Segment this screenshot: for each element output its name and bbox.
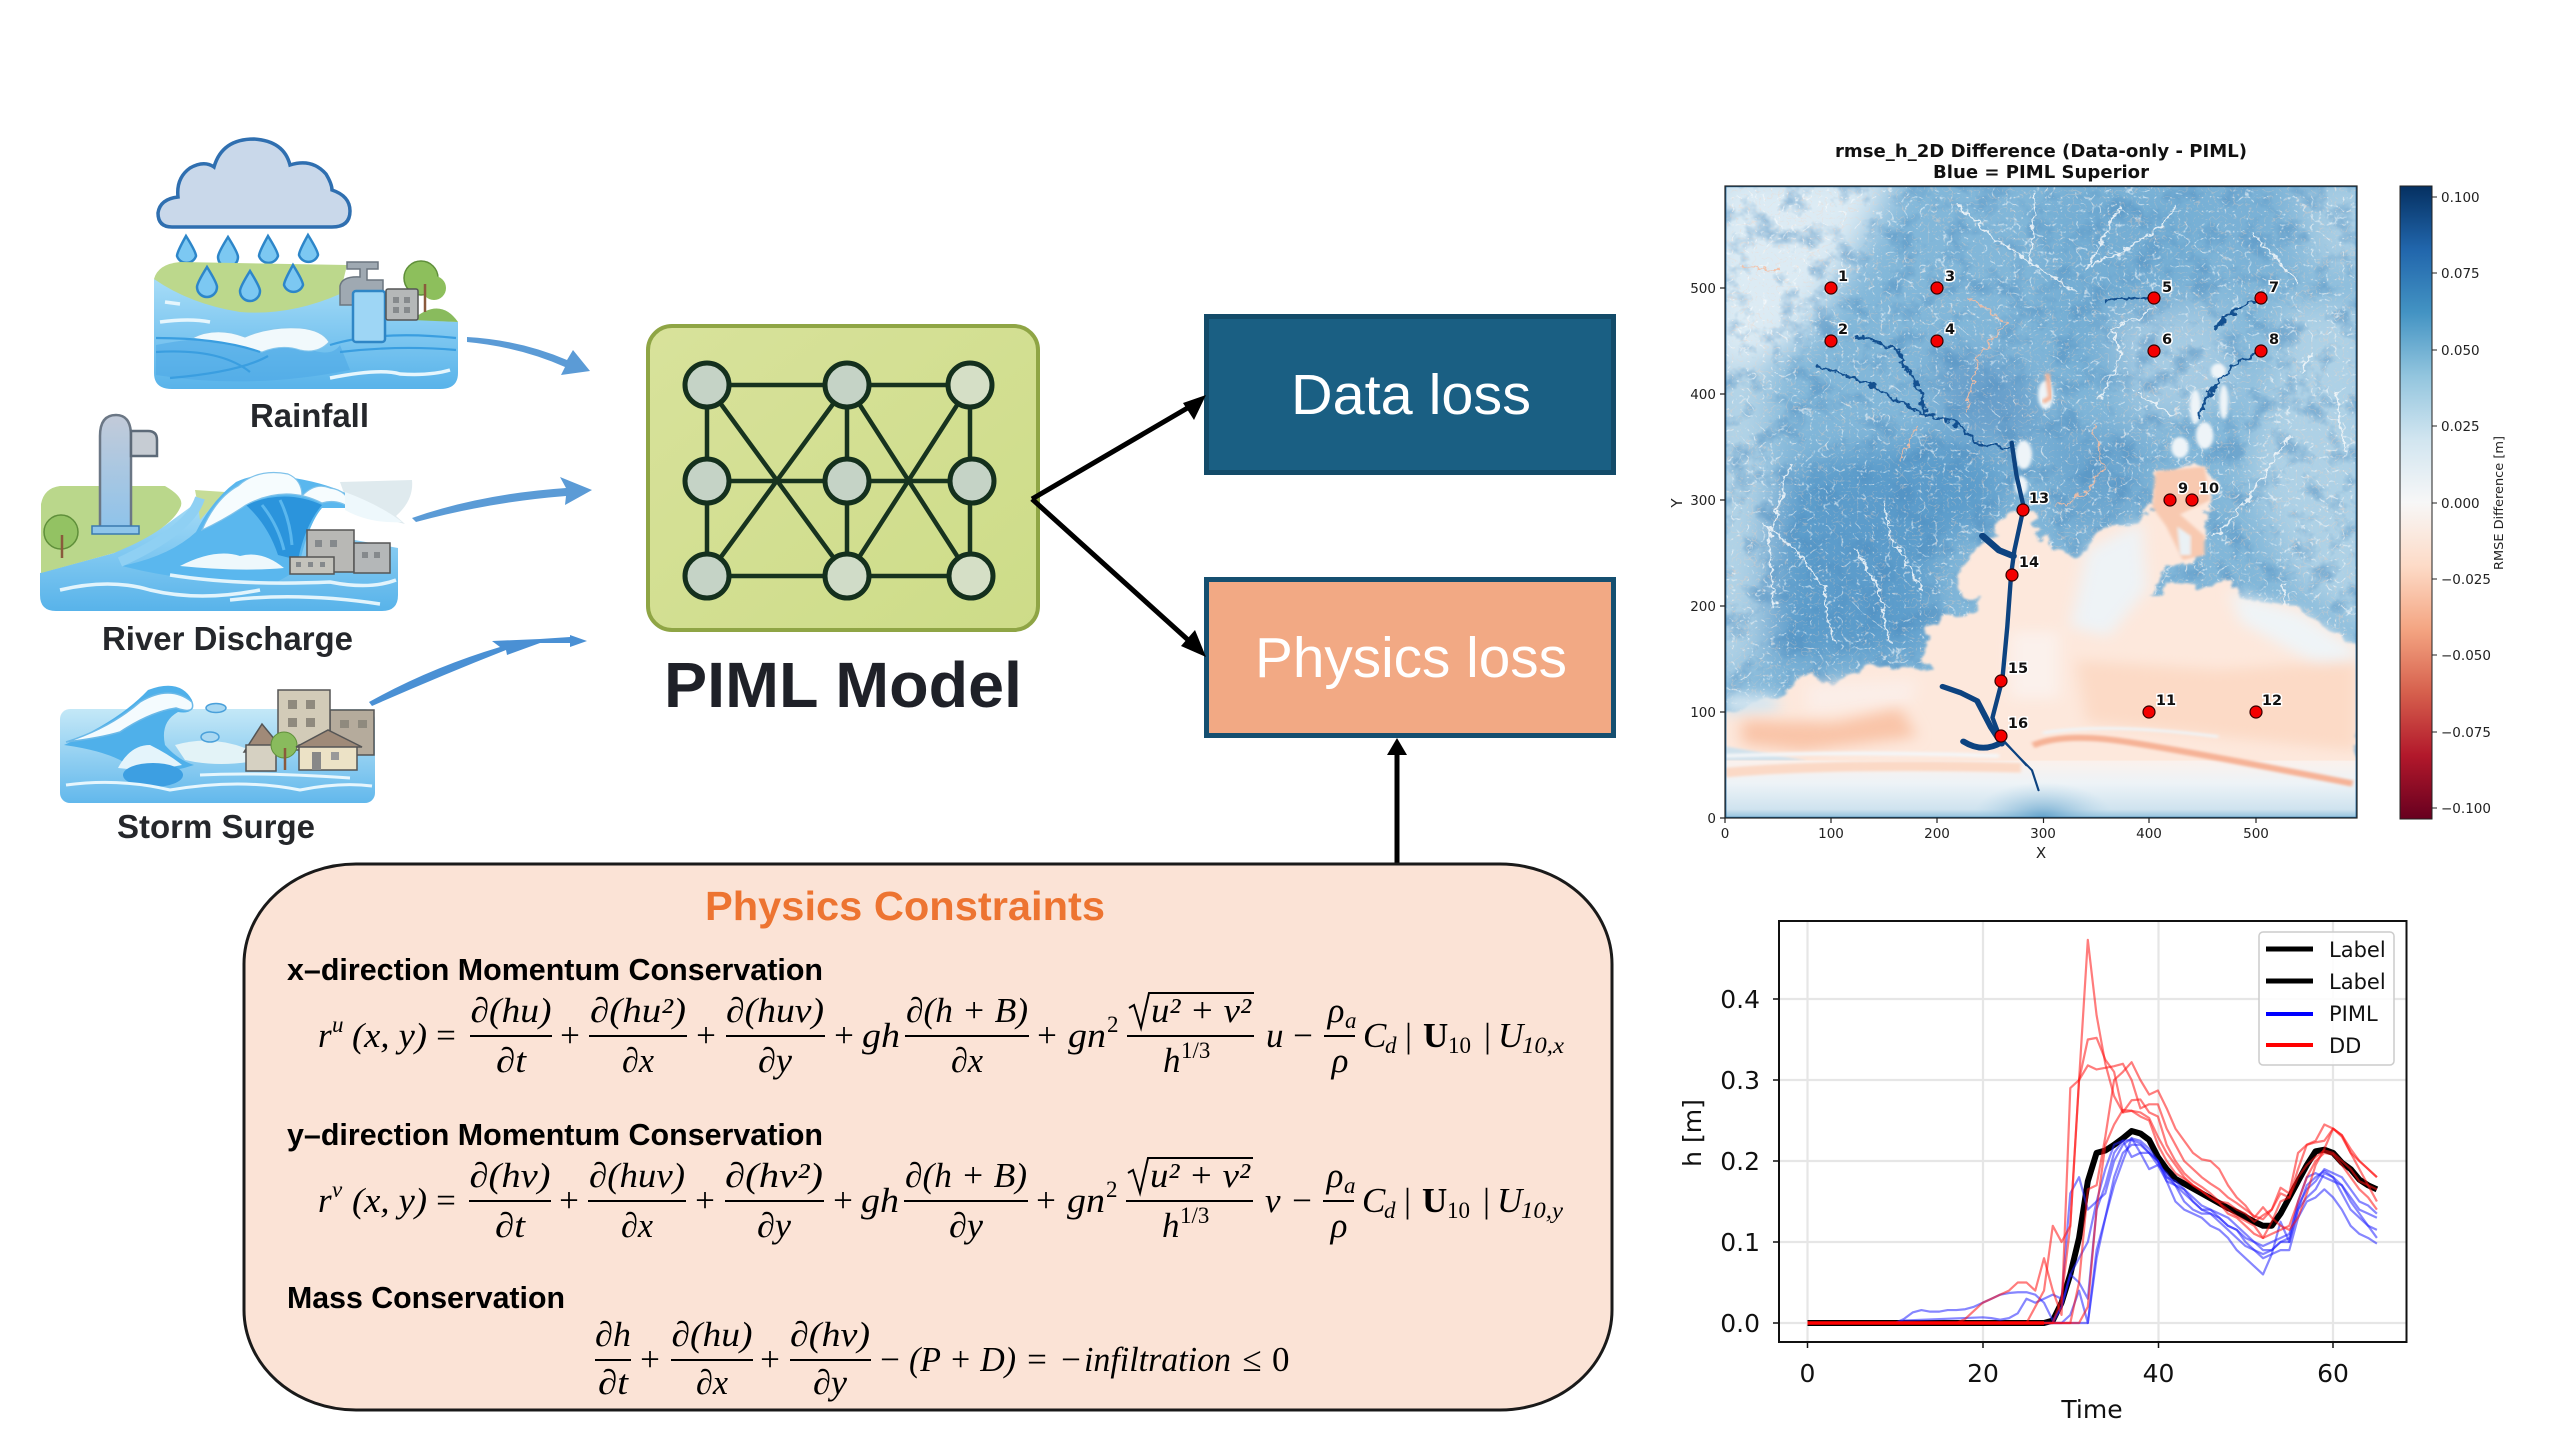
equation: y momentum: ∂(huv) [589,1156,685,1195]
white water streaks [160,302,450,378]
equation: mass conservation: ∂(hu) [672,1315,752,1354]
foam [118,745,182,769]
equation: x momentum: = [436,1016,456,1055]
tower base [92,526,139,534]
label curve [1808,1131,2377,1323]
PIML curves [1808,1138,2377,1323]
equation: mass conservation: ∂x [696,1363,728,1402]
equation: x momentum: gn [1068,1016,1106,1055]
equation: mass conservation: ∂t [598,1363,629,1402]
buildings [244,690,374,771]
equation: mass conservation: infiltration [1084,1340,1231,1379]
y axis label: h [m] [1678,1099,1707,1167]
station labels: 15 [2008,661,2028,677]
station labels: 11 [2156,693,2176,709]
equation: y momentum: 2 [1106,1177,1118,1202]
arrow: model to physics loss [1032,499,1206,657]
equation: x momentum: 10 [1448,1033,1471,1058]
colorbar ticks [2432,197,2437,808]
x tick labels: 20 [1967,1359,1999,1388]
flat DD baseline [1808,1321,2044,1325]
equation: y momentum: 10,y [1521,1198,1564,1223]
station labels: 6 [2162,332,2172,348]
plot background [1779,921,2406,1342]
arrow: storm surge to model [369,635,587,706]
box: Physics loss: Physics loss [1255,626,1567,690]
station labels: 1 [1838,269,1848,285]
spray drops [201,704,226,742]
y tick labels: 300 [1690,493,1716,509]
wave tube [246,496,322,560]
equation: x momentum: 1/3 [1181,1038,1210,1063]
land orange vein texture [1725,186,2357,712]
equation: mass conservation: ∂(hv) [790,1315,870,1354]
land white vein texture [1725,186,2357,712]
panel: physics constraints [244,864,1612,1410]
label: PIML Model: PIML Model [664,649,1022,721]
colorbar labels: −0.050 [2441,648,2491,664]
equation: y momentum: r [318,1181,332,1220]
label: Storm Surge: Storm Surge [117,808,315,845]
equation: y momentum [318,1156,1564,1245]
y tick labels [1690,281,1716,827]
station labels: 16 [2008,716,2028,732]
arrow: constraints to physics loss [1387,738,1407,864]
equation: y momentum: = [436,1181,456,1220]
tower [100,415,131,527]
y tick labels: 400 [1690,387,1716,403]
equation: x momentum: h [1163,1041,1180,1080]
equation: x momentum: U [1423,1016,1448,1055]
colorbar labels: 0.075 [2441,266,2480,282]
inland pale pool [2177,526,2191,555]
left coastal orange patch [1741,708,1917,751]
equation: mass conservation: − [1061,1340,1081,1379]
equation: x momentum: gh [862,1016,900,1055]
y tick labels: 200 [1690,599,1716,615]
colorbar labels [2441,190,2491,817]
wave crest [202,472,353,530]
arrow: rainfall to model [467,337,590,375]
network edges [707,385,970,576]
x tick labels: 200 [1924,826,1950,842]
equation: y momentum: | [1483,1181,1490,1220]
heading: x momentum: x–direction Momentum Conservation [287,952,823,987]
arrow: river discharge to model [412,477,592,522]
station labels: 3 [1945,269,1955,285]
x axis label: X [2036,844,2046,862]
tree [44,515,78,558]
equation: y momentum: + [833,1181,853,1220]
equation: mass conservation: + [640,1340,660,1379]
equation: y momentum: − [1292,1181,1312,1220]
colorbar labels: 0.050 [2441,343,2480,359]
equation: y momentum: u² + v² [1150,1156,1251,1195]
x tick labels: 500 [2243,826,2269,842]
network nodes [685,363,994,598]
equation: x momentum: a [1345,1008,1356,1033]
x tick labels: 100 [1818,826,1844,842]
equation: y momentum: v [1265,1181,1281,1220]
arrow: model to data loss [1032,395,1206,499]
legend: Label [2329,938,2386,962]
legend: Label [2329,970,2386,994]
station labels: 10 [2199,481,2219,497]
plain shading [1725,522,2357,751]
icon: tree [404,261,458,322]
equation: y momentum: ∂(h + B) [905,1156,1027,1195]
scene: storm surge [60,686,375,845]
wave lines [156,335,456,378]
equation: y momentum: C [1362,1181,1386,1220]
y tick labels: 500 [1690,281,1716,297]
equation: y momentum: + [1036,1181,1056,1220]
equation: mass conservation: + [760,1340,780,1379]
inland orange patch [2153,467,2210,560]
station labels: 8 [2269,332,2279,348]
x tick labels [1800,1359,2349,1388]
equation: x momentum: ∂(hu) [470,991,552,1030]
land [41,486,181,573]
x tick labels: 60 [2317,1359,2349,1388]
equation: x momentum: | [1484,1016,1491,1055]
y tick labels: 100 [1690,705,1716,721]
station labels: 14 [2019,555,2039,571]
x tick labels: 0 [1800,1359,1815,1388]
box: Data loss [1206,316,1614,472]
icon: building [386,289,418,320]
y tick labels: 0.4 [1720,985,1760,1014]
equation: y momentum: ∂y [757,1206,791,1245]
station labels: 4 [1945,322,1955,338]
equation: y momentum: ρ [1330,1206,1347,1245]
wave tube arcs [262,500,292,550]
station labels: 5 [2162,280,2172,296]
y tick labels: 0.1 [1720,1228,1760,1257]
equation: y momentum: 10 [1447,1198,1470,1223]
equation: y momentum: + [559,1181,579,1220]
heat map [1726,186,2356,818]
equation: y momentum: U [1497,1181,1525,1220]
x tick labels: 400 [2136,826,2162,842]
equation: x momentum: ∂x [951,1041,983,1080]
equation: x momentum: + [696,1016,716,1055]
legend: PIML [2329,1002,2378,1026]
station labels: 13 [2029,491,2049,507]
equation: y momentum: 1/3 [1180,1203,1209,1228]
buildings [290,530,390,574]
tower head [131,431,157,456]
water block [40,500,398,611]
tributaries [1815,298,2259,449]
sea swell [123,763,183,787]
sea plume [1972,782,2114,854]
equation: y momentum: ρ [1326,1156,1343,1195]
scene: river discharge [40,415,412,657]
spray [175,741,260,764]
equation: x momentum: ∂(hu²) [590,991,686,1030]
icon: house [296,730,362,770]
y tick labels: 0.3 [1720,1066,1760,1095]
grid lines [1779,921,2406,1342]
panel background [244,864,1612,1410]
equation: y momentum: U [1422,1181,1447,1220]
chart: water depth time series [1678,921,2406,1424]
equation: x momentum: d [1385,1033,1397,1058]
water streaks [66,774,372,790]
equation: y momentum: gn [1067,1181,1105,1220]
y axis label: Y [1668,498,1686,509]
colorbar labels: −0.025 [2441,572,2491,588]
equation: x momentum: − [1293,1016,1313,1055]
equation: y momentum: ∂t [495,1206,526,1245]
y tick labels: 0.0 [1720,1309,1760,1338]
curves [1808,940,2377,1323]
colorbar title: RMSE Difference [m] [2491,436,2506,570]
tick marks [1773,999,2333,1348]
station labels [1838,269,2282,732]
haze [340,480,412,524]
DD curves [1808,940,2377,1323]
equation: y momentum: | [1404,1181,1411,1220]
wave body [122,475,351,582]
label: River Discharge: River Discharge [102,620,353,657]
colorbar labels: 0.000 [2441,496,2480,512]
heading: y momentum: y–direction Momentum Conservation [287,1117,823,1152]
scene: rainfall [154,139,458,434]
panel: PIML model icon [648,326,1038,630]
box: Data loss: Data loss [1291,363,1531,427]
map border shade [1725,186,2357,818]
label: Rainfall: Rainfall [250,397,369,434]
pale patches along rivers [2014,363,2228,495]
equation: x momentum: + [560,1016,580,1055]
wave body [64,686,194,771]
map title [1835,142,2247,183]
equation: y momentum: (x, y) [352,1181,427,1220]
icon: rain drops [177,235,318,267]
orange stream spot [2043,373,2051,402]
x tick labels: 300 [2030,826,2056,842]
equation: mass conservation: (P + D) [909,1340,1016,1379]
heading: mass conservation: Mass Conservation [287,1280,565,1315]
equation: x momentum: ∂y [758,1041,792,1080]
equation: x momentum: + [834,1016,854,1055]
icon: cloud [158,139,350,227]
equation: x momentum: 2 [1107,1012,1118,1037]
equation: y momentum: ∂(hv) [470,1156,550,1195]
equation: x momentum: U [1498,1016,1526,1055]
equation: y momentum: + [695,1181,715,1220]
map title: Blue = PIML Superior [1933,163,2149,183]
colorbar labels: 0.100 [2441,190,2480,206]
land mottling [1725,186,2357,712]
water streaks [60,575,396,604]
bay and coastal plain [1720,464,2366,770]
wave crest [192,328,329,352]
y tick labels: 0.2 [1720,1147,1760,1176]
equation: x momentum: ∂(h + B) [906,991,1028,1030]
icon: tap and glass [340,262,385,342]
equation: x momentum: | [1405,1016,1412,1055]
station markers [1825,282,2267,742]
equation: x momentum: 10,x [1522,1033,1565,1058]
left coastal pale strip [1725,746,1807,761]
equation: y momentum: ∂(hv²) [725,1156,823,1195]
equation: x momentum: ρ [1331,1041,1348,1080]
y tick labels [1720,985,1760,1338]
main river [1943,443,2039,790]
equation: x momentum: ∂x [622,1041,654,1080]
equation: y momentum: v [332,1177,343,1202]
equation: y momentum: ∂y [949,1206,983,1245]
legend [2259,932,2394,1065]
equation: x momentum: ρ [1327,991,1344,1030]
colorbar [2400,186,2432,819]
equation: y momentum: h [1162,1206,1180,1245]
equation: mass conservation: ∂y [813,1363,847,1402]
equation: x momentum: ∂(huv) [726,991,824,1030]
station labels: 12 [2262,693,2282,709]
y tick labels: 0 [1707,811,1716,827]
equation: mass conservation: ≤ [1242,1340,1262,1379]
station labels: 7 [2269,280,2279,296]
station labels: 9 [2178,481,2188,497]
equation: mass conservation: ∂h [595,1315,631,1354]
box: Physics loss [1206,580,1614,736]
map frame [1725,186,2357,818]
wave base foam [180,492,402,570]
box [648,326,1038,630]
equation: y momentum: gh [861,1181,899,1220]
equation: x momentum: r [318,1016,332,1055]
wave crest [66,693,193,742]
equation: mass conservation: 0 [1272,1340,1290,1379]
equation: mass conservation [595,1315,1290,1402]
orange stream network [1741,266,2104,507]
equation: y momentum: ∂x [621,1206,653,1245]
station labels: 2 [1838,322,1848,338]
colorbar labels: −0.100 [2441,801,2491,817]
barrier island bands [1725,728,2353,784]
equation: x momentum: C [1363,1016,1387,1055]
equation: y momentum: d [1384,1198,1396,1223]
equation: mass conservation: = [1027,1340,1047,1379]
sea [1725,761,2357,818]
equation: x momentum: + [1037,1016,1057,1055]
water block [60,709,375,803]
legend: DD [2329,1034,2361,1058]
plot frame [1779,921,2406,1342]
chart: RMSE difference map [1668,142,2506,862]
white stream network [1763,192,2345,646]
x axis label: Time [2060,1395,2123,1424]
land [154,262,347,313]
panel title: Physics Constraints [705,883,1105,929]
colorbar labels: −0.075 [2441,725,2491,741]
wave swell [156,338,350,381]
x tick labels: 40 [2143,1359,2174,1388]
equation: x momentum: ∂t [496,1041,527,1080]
equation: mass conservation: − [880,1340,900,1379]
icon: tree [271,732,297,770]
equation: x momentum: u [332,1012,344,1037]
x tick marks [1720,288,2256,823]
x tick labels [1721,826,2269,842]
equation: y momentum: a [1344,1173,1356,1198]
water block [154,279,458,389]
equation: x momentum: u² + v² [1151,991,1252,1030]
icon: rain drops on land [197,265,303,301]
river channel [120,498,200,562]
land right of river [195,490,225,520]
equation: x momentum: u [1266,1016,1284,1055]
map title: rmse_h_2D Difference (Data-only - PIML) [1835,142,2247,162]
equation: x momentum: (x, y) [352,1016,427,1055]
colorbar labels: 0.025 [2441,419,2480,435]
equation: x momentum [318,991,1565,1080]
x tick labels: 0 [1721,826,1729,842]
